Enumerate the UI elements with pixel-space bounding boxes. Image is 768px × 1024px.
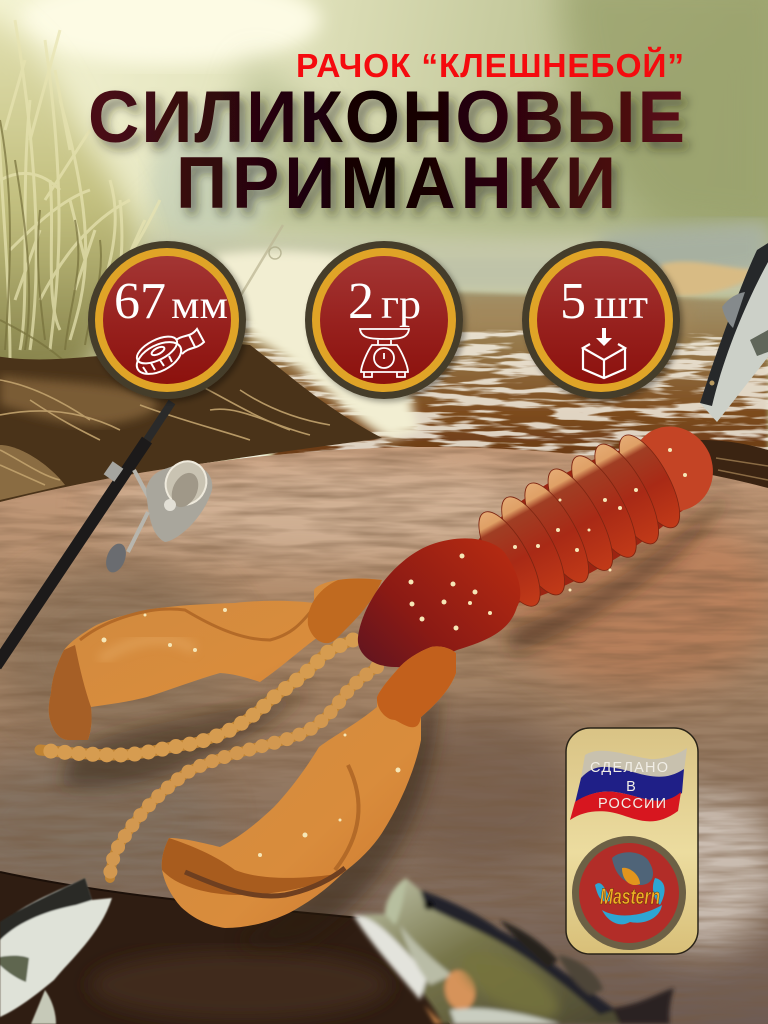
icon: tape measure xyxy=(132,329,204,380)
logo: Mastern xyxy=(572,836,686,950)
label: 2 gr: гр xyxy=(381,282,421,328)
icon: kitchen scale xyxy=(360,329,409,377)
label: 2 gr xyxy=(348,273,421,330)
fishing rod with reel xyxy=(0,225,283,666)
river water xyxy=(170,280,768,500)
label: 67 mm: мм xyxy=(171,282,228,327)
lower claw xyxy=(162,646,456,928)
badge card: made in Russia and brand xyxy=(566,728,698,954)
heading line 2: ПРИМАНКИ xyxy=(176,143,616,224)
label: 67 mm: 67 xyxy=(114,273,166,330)
label: 2 gr: 2 xyxy=(348,273,374,330)
bait shadow xyxy=(60,490,730,948)
flag caption: В xyxy=(626,779,636,795)
glitter xyxy=(102,448,687,857)
reel xyxy=(102,455,213,575)
label: 5 pcs: 5 xyxy=(560,273,586,330)
heading line 1: СИЛИКОНОВЫЕ xyxy=(88,77,685,158)
icon: box with arrow xyxy=(583,328,625,378)
flag caption: РОССИИ xyxy=(598,796,666,812)
label: 67 mm xyxy=(114,273,228,330)
flag: Russia xyxy=(570,748,687,821)
badge: length 67 mm xyxy=(88,241,246,399)
ribbed tail xyxy=(463,400,735,619)
grass xyxy=(0,0,140,410)
subtitle: РАЧОК “КЛЕШНЕБОЙ” xyxy=(296,46,684,85)
label: 5 pcs: шт xyxy=(594,282,648,328)
logo art: Mastern xyxy=(600,884,660,909)
river bank xyxy=(0,344,382,505)
flag caption: СДЕЛАНО xyxy=(590,760,668,776)
badge: quantity 5 pcs xyxy=(522,241,680,399)
label: 5 pcs xyxy=(560,273,648,330)
antennae xyxy=(40,640,377,878)
upper claw xyxy=(49,578,382,740)
fish: top right xyxy=(700,243,768,422)
fish: bottom left xyxy=(0,878,112,1024)
flag caption xyxy=(590,760,668,812)
background: river landscape xyxy=(0,0,768,502)
head xyxy=(358,538,520,667)
badge: weight 2 gr xyxy=(305,241,463,399)
fish: bottom center bass xyxy=(353,878,674,1024)
rock slab foreground xyxy=(0,445,768,1024)
silicone bait xyxy=(40,400,735,928)
title block xyxy=(88,46,685,224)
